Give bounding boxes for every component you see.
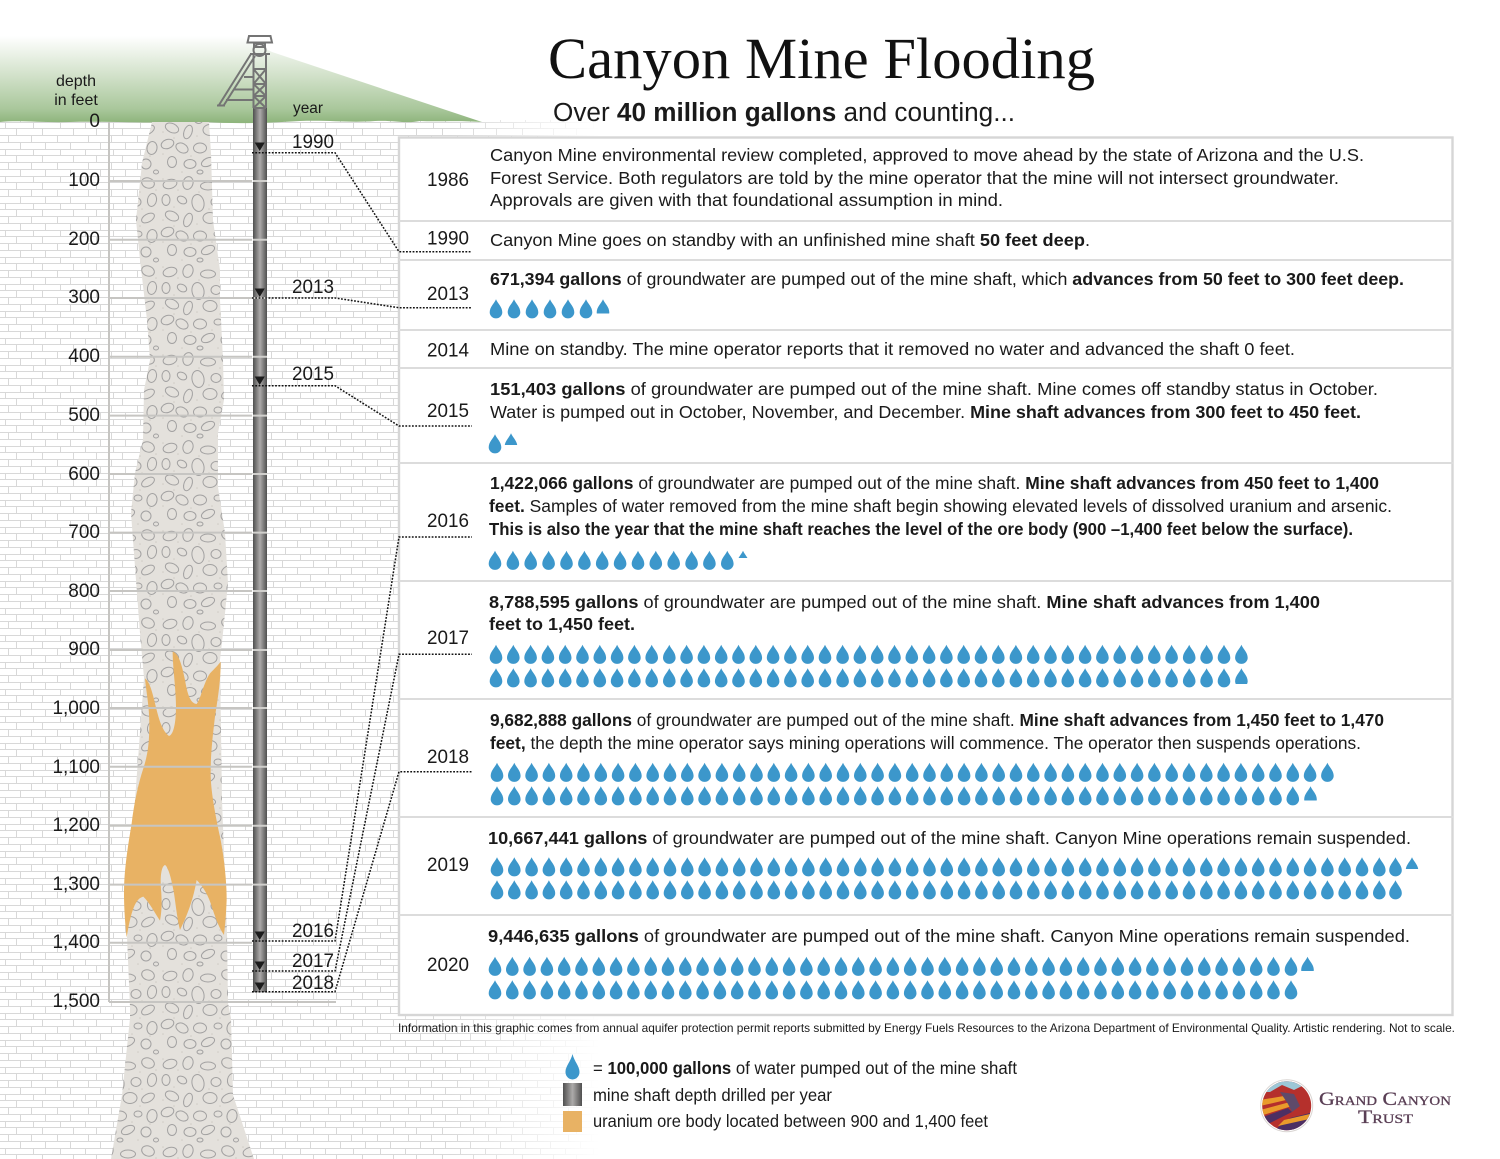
row: 2019: 2019 bbox=[427, 855, 469, 876]
depth scale labels bbox=[52, 73, 100, 1012]
depth axis with grid lines bbox=[109, 122, 336, 1002]
row: 1986 bbox=[427, 145, 1364, 210]
row: 2015 bbox=[427, 379, 1378, 453]
depth scale labels: 600 bbox=[68, 464, 100, 485]
row: 2017: feet to 1,450 feet. bbox=[489, 614, 635, 634]
row: 2013: 671,394 gallons of groundwater are pumped out of the mine shaft, which advances from 50 feet to 300 feet deep. bbox=[490, 269, 1404, 289]
depth scale labels: 300 bbox=[68, 287, 100, 308]
depth scale labels: 400 bbox=[68, 346, 100, 367]
row: 1986: Approvals are given with that foundational assumption in mind. bbox=[490, 190, 1003, 210]
row: 2013: 2013 bbox=[427, 284, 469, 305]
row: 2016: feet. Samples of water removed from the mine shaft begin showing elevated levels of dissolved uranium and arsenic. bbox=[489, 496, 1392, 516]
row: 2018: feet, the depth the mine operator says mining operations will commence. The operator then suspends operations. bbox=[490, 733, 1361, 753]
depth scale labels: 1,100 bbox=[52, 757, 100, 778]
depth scale labels: 800 bbox=[68, 581, 100, 602]
legend bbox=[563, 1054, 1017, 1132]
row: 2020: 9,446,635 gallons of groundwater are pumped out of the mine shaft. Canyon Mine operations remain suspended. bbox=[488, 926, 1410, 946]
depth scale labels: in feet bbox=[54, 92, 98, 109]
shaft year labels: 2015 bbox=[292, 364, 334, 385]
row: 2018: 9,682,888 gallons of groundwater are pumped out of the mine shaft. Mine shaft advances from 1,450 feet to 1,470 bbox=[490, 710, 1384, 730]
shaft year labels: 2016 bbox=[292, 921, 334, 942]
shaft year labels: 2018 bbox=[292, 973, 334, 994]
row: 2019 bbox=[427, 828, 1418, 899]
depth scale labels: 1,300 bbox=[52, 874, 100, 895]
shaft year labels: 1990 bbox=[292, 132, 334, 153]
row: 2019: 10,667,441 gallons of groundwater are pumped out of the mine shaft. Canyon Mine operations remain suspended. bbox=[488, 828, 1411, 848]
row: 2020 bbox=[427, 926, 1410, 999]
row: 1990: 1990 bbox=[427, 228, 469, 250]
rock column bbox=[111, 122, 254, 1159]
row: 2020: 2020 bbox=[427, 955, 469, 976]
shaft year labels: 2017 bbox=[292, 951, 334, 972]
depth scale labels: 500 bbox=[68, 405, 100, 426]
row: 2017: 2017 bbox=[427, 628, 469, 649]
row: 2013 bbox=[427, 269, 1404, 318]
row: 2017: 8,788,595 gallons of groundwater are pumped out of the mine shaft. Mine shaft advances from 1,400 bbox=[489, 592, 1320, 612]
mine shaft bbox=[253, 108, 267, 992]
depth scale labels: 0 bbox=[89, 111, 100, 132]
depth scale labels: 1,400 bbox=[52, 932, 100, 953]
row: 2016: 1,422,066 gallons of groundwater are pumped out of the mine shaft. Mine shaft advances from 450 feet to 1,400 bbox=[490, 473, 1379, 493]
logo: Grand Canyon Trust: Trust bbox=[1358, 1107, 1413, 1128]
row: 1986: Forest Service. Both regulators are told by the mine operator that the mine will not intersect groundwater. bbox=[490, 168, 1339, 188]
depth scale labels: 700 bbox=[68, 522, 100, 543]
logo: Grand Canyon Trust bbox=[1260, 1080, 1452, 1132]
depth scale labels: 1,500 bbox=[52, 991, 100, 1012]
legend: ore body: uranium ore body located between 900 and 1,400 feet bbox=[593, 1111, 988, 1131]
legend: mine shaft: mine shaft depth drilled per year bbox=[593, 1085, 832, 1105]
row: 2015: Water is pumped out in October, November, and December. Mine shaft advances from 300 feet to 450 feet. bbox=[490, 402, 1361, 422]
row: 1986: 1986 bbox=[427, 170, 469, 191]
depth scale labels: 200 bbox=[68, 229, 100, 250]
shaft year labels: 2013 bbox=[292, 277, 334, 298]
legend: water drop: = 100,000 gallons of water pumped out of the mine shaft bbox=[593, 1058, 1017, 1078]
depth scale labels: 100 bbox=[68, 170, 100, 191]
row: 2014: Mine on standby. The mine operator reports that it removed no water and advanced the shaft 0 feet. bbox=[490, 339, 1295, 359]
row: 2018 bbox=[427, 710, 1384, 805]
row: 2016: This is also the year that the mine shaft reaches the level of the ore body (900 –1,400 feet below the surface). bbox=[489, 519, 1353, 539]
depth scale labels: 900 bbox=[68, 639, 100, 660]
depth scale labels: 1,000 bbox=[52, 698, 100, 719]
row: 2017 bbox=[427, 592, 1320, 687]
headframe tower bbox=[217, 36, 272, 108]
row: 2015: 2015 bbox=[427, 401, 469, 422]
row: 2015: 151,403 gallons of groundwater are pumped out of the mine shaft. Mine comes off standby status in October. bbox=[490, 379, 1378, 399]
timeline table bbox=[399, 138, 1453, 1015]
logo: Grand Canyon Trust: Grand Canyon bbox=[1319, 1089, 1452, 1110]
row: 1990: Canyon Mine goes on standby with an unfinished mine shaft 50 feet deep. bbox=[490, 230, 1090, 250]
title: Canyon Mine Flooding bbox=[548, 26, 1095, 91]
row: 1986: Canyon Mine environmental review completed, approved to move ahead by the state of Arizona and the U.S. bbox=[490, 145, 1364, 165]
row: 2016: 2016 bbox=[427, 511, 469, 532]
depth scale labels: depth bbox=[56, 73, 96, 90]
source note: Information in this graphic comes from annual aquifer protection permit reports submitted by Energy Fuels Resources to the Arizona Department of Environmental Quality. Artistic rendering. Not to scale. bbox=[398, 1022, 1455, 1035]
row: 2014: 2014 bbox=[427, 340, 469, 362]
connector dotted lines bbox=[252, 153, 472, 992]
green hill surface bbox=[0, 36, 482, 123]
subtitle: Over 40 million gallons and counting... bbox=[553, 99, 1015, 127]
shaft year labels bbox=[292, 132, 334, 994]
depth scale labels: 1,200 bbox=[52, 815, 100, 836]
row: 2016 bbox=[427, 473, 1392, 570]
uranium ore body bbox=[124, 652, 227, 937]
row: 2018: 2018 bbox=[427, 747, 469, 768]
brick background bbox=[0, 120, 600, 1159]
year axis label: year bbox=[293, 100, 323, 117]
